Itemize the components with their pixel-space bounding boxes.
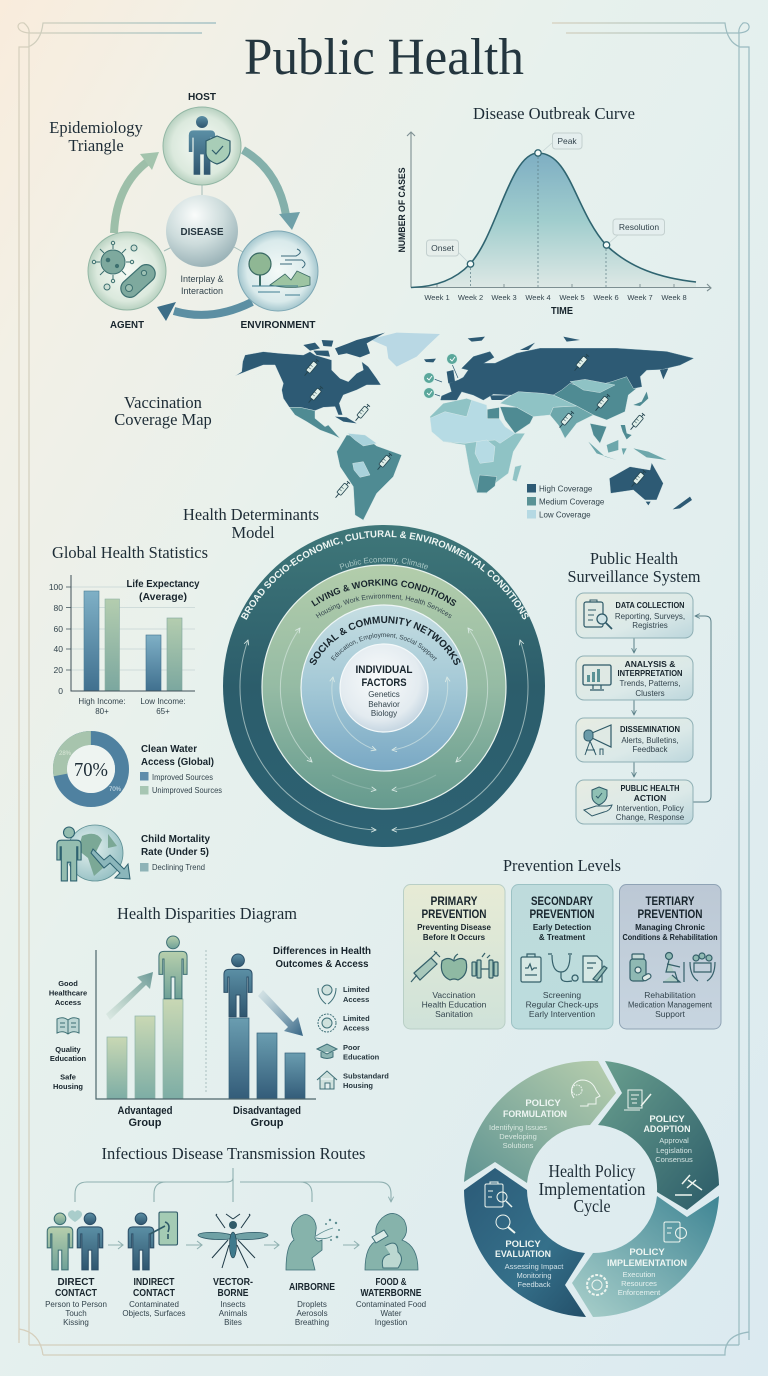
heading: outbreak curve: Disease Outbreak Curve [473, 104, 635, 123]
inner text: Biology [371, 709, 397, 718]
route: direct contact: CONTACT [55, 1288, 97, 1299]
segment: policy evaluation: Monitoring [516, 1271, 552, 1280]
node: agent [88, 232, 166, 310]
curve line [411, 153, 696, 288]
callouts [426, 133, 664, 262]
card: tertiary prevention: Support [655, 1009, 686, 1019]
card: tertiary prevention [620, 884, 721, 1029]
card: tertiary prevention: PREVENTION [638, 909, 702, 921]
route: food and waterborne: Ingestion [375, 1318, 407, 1327]
clean water text and legend: Improved Sources [152, 773, 213, 782]
right list: Access [343, 995, 369, 1004]
segment: policy formulation [464, 1061, 616, 1183]
route: food and waterborne: FOOD & [376, 1277, 406, 1288]
card: secondary prevention: PREVENTION [530, 909, 594, 921]
arrow: environment to agent [157, 302, 252, 321]
route: food and waterborne: WATERBORNE [360, 1288, 422, 1299]
donut chart: clean water [55, 733, 127, 805]
inner text: Behavior [368, 700, 400, 709]
left labels [49, 979, 87, 1091]
center label: health policy cycle: Health Policy [548, 1161, 636, 1181]
segment: policy formulation: Identifying Issues [489, 1123, 547, 1132]
week labels: Week 5 [559, 293, 585, 302]
step: analysis: Trends, Patterns, [619, 679, 681, 688]
panel: health policy cycle [464, 1061, 719, 1317]
route: direct contact: Person to Person [45, 1300, 107, 1309]
arrow: up [106, 972, 153, 1020]
route: indirect contact: INDIRECT [134, 1277, 174, 1288]
ring 3 [301, 605, 467, 771]
card: secondary prevention: Early Intervention [529, 1009, 595, 1019]
arrow [108, 1241, 123, 1249]
arrow [264, 1241, 279, 1249]
bar chart: life expectancy: 0 [58, 686, 63, 696]
heading: disparities: Health Disparities Diagram [117, 904, 297, 923]
segment: policy formulation: POLICY [525, 1098, 561, 1109]
donut chart: clean water: 70% [109, 787, 122, 793]
heading: vaccination map: Coverage Map [114, 410, 212, 429]
inner text: INDIVIDUAL [356, 664, 413, 676]
branching arrows [75, 1168, 391, 1202]
card: tertiary prevention: Medication Management [628, 1000, 713, 1010]
bar chart: life expectancy: High Income: [78, 697, 126, 706]
card: primary prevention: PREVENTION [422, 909, 486, 921]
heading: statistics: Global Health Statistics [52, 543, 208, 562]
right list: Education [343, 1052, 380, 1062]
card: primary prevention: Sanitation [435, 1009, 473, 1019]
route: food and waterborne: Water [380, 1309, 402, 1318]
connector lines to disease [164, 185, 243, 252]
panel: health determinants model [183, 505, 545, 847]
week labels: Week 8 [661, 293, 687, 302]
right list: Limited [343, 985, 370, 994]
card: secondary prevention [512, 884, 613, 1029]
node: environment [238, 231, 318, 311]
segment: policy implementation: Execution [623, 1270, 655, 1279]
route: vector-borne: Bites [224, 1318, 242, 1327]
bar chart: life expectancy: Low Income: [140, 697, 186, 706]
week labels: Week 4 [525, 293, 551, 302]
divider [205, 950, 207, 1092]
figure: disadvantaged person [224, 954, 252, 1017]
inner text [356, 664, 413, 718]
panel: global health statistics [49, 543, 222, 881]
panel: health disparities [49, 904, 389, 1129]
route: vector-borne: VECTOR- [213, 1277, 253, 1288]
route: vector-borne [198, 1214, 268, 1327]
center label: health policy cycle: Cycle [574, 1196, 610, 1216]
segment: policy implementation: Enforcement [618, 1288, 661, 1297]
route: vector-borne: Insects [220, 1300, 246, 1309]
child mortality text and legend: Child Mortality [141, 833, 210, 845]
flow connectors [634, 616, 711, 802]
bar chart: life expectancy: 100 [49, 582, 63, 592]
week labels: Week 2 [458, 293, 483, 302]
heading: epidemiology triangle: Triangle [68, 136, 124, 155]
clean water text and legend [140, 743, 222, 795]
card: secondary prevention: Early Detection [533, 923, 591, 932]
route: vector-borne: BORNE [218, 1288, 249, 1299]
segment: policy implementation [572, 1196, 719, 1317]
arrow [343, 1241, 359, 1249]
map legend: Medium Coverage [539, 498, 605, 506]
inner text: Genetics [368, 690, 400, 699]
bar chart: life expectancy: 20 [54, 665, 63, 675]
route: airborne: AIRBORNE [289, 1282, 335, 1293]
step: data collection: DATA COLLECTION [616, 600, 684, 610]
x axis label: TIME [551, 306, 573, 317]
heading: determinants: Model [231, 523, 275, 542]
ring 2 text: LIVING & WORKING CONDITIONS [311, 579, 456, 606]
segment: policy adoption: ADOPTION [644, 1124, 691, 1135]
card: primary prevention: PRIMARY [430, 896, 478, 908]
heading: determinants: Health Determinants [183, 505, 319, 524]
step: analysis: ANALYSIS & [625, 659, 675, 669]
map legend: High Coverage [539, 484, 593, 494]
step: public health action: PUBLIC HEALTH [620, 783, 680, 793]
segment: policy adoption: Legislation [656, 1146, 692, 1155]
card: primary prevention: Vaccination [432, 990, 476, 1000]
label: environment: ENVIRONMENT [240, 319, 316, 331]
left labels: Healthcare [49, 988, 87, 998]
ring 3 text: SOCIAL & COMMUNITY NETWORKS [310, 616, 460, 665]
card: secondary prevention: & Treatment [539, 933, 585, 942]
route: food and waterborne [356, 1213, 426, 1327]
segment: policy evaluation: Feedback [518, 1280, 551, 1289]
title: Public Health [244, 29, 524, 86]
heading: epidemiology triangle: Epidemiology [49, 118, 143, 137]
map legend [527, 484, 605, 520]
right list: Substandard [343, 1072, 389, 1080]
week labels: Week 7 [627, 293, 653, 302]
heading: surveillance: Surveillance System [568, 567, 701, 586]
group labels: Group [128, 1117, 162, 1129]
inner text: FACTORS [362, 677, 406, 689]
label: disease: DISEASE [180, 226, 224, 238]
card: tertiary prevention: TERTIARY [646, 896, 695, 908]
step: dissemination: Feedback [632, 745, 669, 754]
group labels: Group [250, 1117, 284, 1129]
label: host: HOST [188, 92, 216, 103]
segment: policy implementation: Resources [621, 1279, 657, 1288]
panel: surveillance system [568, 549, 711, 824]
arrow [186, 1241, 202, 1249]
segment: policy evaluation [464, 1168, 586, 1317]
step: data collection [576, 593, 693, 638]
step: analysis: Clusters [635, 689, 665, 698]
outer ring text: BROAD SOCIO-ECONOMIC, CULTURAL & ENVIRONMENTAL CONDITIONS [240, 530, 529, 620]
card: primary prevention: Before It Occurs [423, 933, 486, 942]
clean water text and legend: Access (Global) [141, 756, 214, 768]
route: indirect contact: CONTACT [133, 1288, 175, 1299]
segment: policy adoption [598, 1061, 719, 1210]
outer ring [223, 525, 545, 847]
map markers: check badges [424, 354, 458, 398]
curve markers [467, 150, 610, 267]
segment: policy formulation: Solutions [503, 1141, 534, 1150]
step: public health action [576, 780, 693, 824]
route: direct contact [45, 1210, 107, 1327]
route: food and waterborne: Contaminated Food [356, 1300, 426, 1309]
right list: Housing [343, 1081, 373, 1090]
left labels: Quality [55, 1045, 82, 1054]
world map [235, 333, 693, 522]
segment: policy implementation: IMPLEMENTATION [607, 1258, 687, 1269]
route: direct contact: DIRECT [58, 1277, 94, 1288]
map legend: Low Coverage [539, 510, 591, 520]
panel: disease outbreak curve [397, 104, 711, 317]
chart title: (Average) [139, 591, 187, 603]
differences heading: Outcomes & Access [276, 958, 369, 970]
card: tertiary prevention: Managing Chronic [635, 923, 705, 932]
bar chart: life expectancy [49, 575, 195, 716]
ring arrows [240, 628, 528, 830]
panel: epidemiology triangle [49, 92, 318, 331]
week labels: Week 3 [491, 293, 517, 302]
map markers: syringes [303, 354, 646, 499]
donut chart: clean water: 70% [74, 759, 108, 781]
panel: transmission routes [45, 1144, 426, 1327]
left labels: Education [50, 1054, 87, 1063]
clean water text and legend: Unimproved Sources [152, 786, 222, 795]
outer ring subtext: Public Economy, Climate [340, 558, 428, 570]
segment: policy adoption: Consensus [655, 1155, 693, 1164]
left labels: Housing [53, 1082, 83, 1091]
right list: Access [343, 1024, 369, 1032]
group labels: Advantaged [118, 1105, 172, 1117]
arrow: down [258, 990, 303, 1036]
step: public health action: Change, Response [616, 813, 685, 822]
segment: policy adoption: Approval [659, 1136, 689, 1145]
route: direct contact: Touch [65, 1309, 87, 1318]
center label: health policy cycle: Implementation [538, 1179, 646, 1199]
node: host [163, 107, 241, 185]
card: primary prevention [404, 884, 505, 1029]
bar chart: life expectancy: 80+ [95, 707, 109, 716]
arrow: host to environment [243, 150, 300, 230]
card: secondary prevention: SECONDARY [531, 896, 593, 908]
route: airborne: Breathing [295, 1318, 329, 1327]
donut chart: clean water: 28% [59, 751, 72, 757]
clean water text and legend: Clean Water [141, 743, 197, 755]
right list [317, 985, 389, 1090]
segment: policy evaluation: Assessing Impact [505, 1262, 564, 1271]
card: secondary prevention: Regular Check-ups [526, 1000, 598, 1010]
figure: advantaged person [159, 936, 187, 999]
label: interplay: Interplay & [180, 274, 224, 284]
differences heading: Differences in Health [273, 945, 371, 957]
y axis label: NUMBER OF CASES [397, 168, 408, 252]
curve area [411, 153, 696, 288]
group labels: Disadvantaged [233, 1105, 301, 1117]
node: disease [166, 195, 238, 267]
step: data collection: Registries [632, 621, 668, 630]
route: airborne: Droplets [297, 1300, 327, 1309]
panel: vaccination coverage map [114, 333, 693, 522]
callouts: Peak [557, 136, 577, 146]
route: vector-borne: Animals [219, 1309, 247, 1318]
segment: policy evaluation: EVALUATION [495, 1249, 551, 1260]
card: tertiary prevention: Conditions & Rehabilitation [622, 933, 718, 942]
week labels: Week 6 [593, 293, 619, 302]
guide lines and ticks [470, 153, 606, 287]
route: indirect contact: Contaminated [129, 1300, 179, 1309]
segment: policy formulation: Developing [499, 1132, 537, 1141]
right list: Poor [343, 1043, 360, 1052]
inner circle [340, 644, 428, 732]
step: data collection: Reporting, Surveys, [615, 612, 685, 621]
card: tertiary prevention: Rehabilitation [644, 990, 696, 1000]
route: indirect contact [122, 1212, 186, 1318]
heading: transmission: Infectious Disease Transmission Routes [102, 1144, 366, 1163]
route: indirect contact: Objects, Surfaces [122, 1309, 186, 1318]
label: agent: AGENT [110, 319, 145, 331]
panel: prevention levels [404, 856, 721, 1029]
axes [407, 132, 711, 291]
callouts: Onset [431, 243, 454, 253]
child mortality text and legend [140, 833, 210, 872]
left labels: Safe [60, 1072, 76, 1082]
card: primary prevention: Health Education [422, 1000, 487, 1010]
step: dissemination: Alerts, Bulletins, [621, 736, 679, 745]
ring 3 subtext: Education, Employment, Social Support [330, 633, 437, 662]
step: dissemination: DISSEMINATION [620, 724, 680, 734]
heading: prevention: Prevention Levels [503, 856, 621, 875]
callouts: Resolution [619, 222, 659, 232]
step: dissemination [576, 718, 693, 762]
segment: policy implementation: POLICY [629, 1247, 665, 1258]
axes [96, 950, 316, 1099]
left labels: Access [55, 998, 81, 1007]
advantaged bars [107, 999, 183, 1099]
ring 2 [262, 565, 506, 809]
bar chart: life expectancy: 60 [54, 624, 63, 634]
week labels: Week 1 [424, 293, 450, 302]
bar chart: life expectancy: 65+ [156, 707, 170, 716]
bar chart: life expectancy: 80 [54, 603, 63, 613]
ring 2 subtext: Housing, Work Environment, Health Services [316, 594, 452, 618]
heading: vaccination map: Vaccination [124, 393, 202, 412]
route: direct contact: Kissing [63, 1318, 89, 1327]
segment: policy evaluation: POLICY [505, 1239, 541, 1250]
route: airborne: Aerosols [296, 1309, 328, 1318]
left labels: Good [58, 979, 78, 988]
chart title: Life Expectancy [126, 578, 200, 590]
segment: policy adoption: POLICY [649, 1114, 685, 1125]
child mortality text and legend: Declining Trend [152, 863, 205, 872]
step: analysis [576, 656, 693, 700]
step: analysis: INTERPRETATION [618, 668, 682, 678]
disadvantaged bars [229, 1018, 305, 1099]
child mortality text and legend: Rate (Under 5) [141, 846, 209, 858]
right list: Limited [343, 1014, 370, 1023]
bar chart: life expectancy: 40 [54, 644, 63, 654]
arrow: agent to host [114, 152, 159, 233]
card: secondary prevention: Screening [543, 990, 581, 1000]
card: primary prevention: Preventing Disease [417, 923, 491, 932]
icon: child and globe [57, 825, 130, 881]
step: public health action: Intervention, Policy [616, 804, 684, 813]
step: public health action: ACTION [634, 793, 666, 803]
label: interplay: Interaction [181, 286, 223, 296]
route: airborne [286, 1214, 340, 1327]
heading: surveillance: Public Health [590, 549, 679, 568]
segment: policy formulation: FORMULATION [503, 1109, 567, 1120]
